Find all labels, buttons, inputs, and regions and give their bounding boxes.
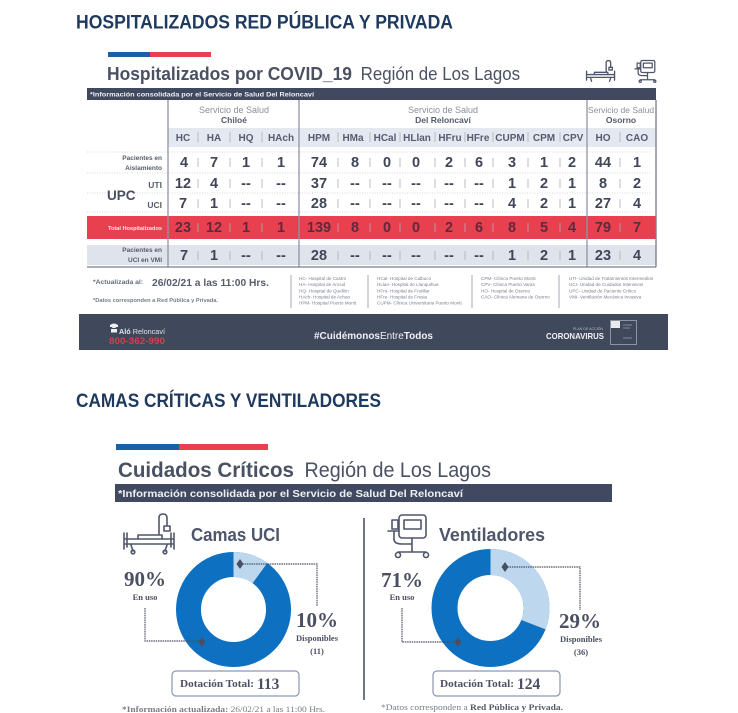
column headers: HQ	[238, 133, 254, 144]
panel: cuidados críticos infographic	[115, 444, 612, 713]
column headers: HCal	[374, 133, 397, 144]
update note	[93, 277, 269, 304]
row: total hospitalizados: 8	[351, 220, 359, 236]
row: UTI: --	[411, 176, 421, 192]
footer band: 800-362-990	[109, 336, 165, 346]
row: UCI: --	[474, 196, 484, 212]
row: total hospitalizados: 4	[568, 220, 576, 236]
donut: camas UCI	[188, 552, 278, 654]
row: UTI: --	[276, 176, 286, 192]
row: total hospitalizados: 7	[633, 220, 641, 236]
column headers: HLlan	[403, 133, 431, 144]
flag bar	[108, 52, 211, 57]
legend of abbreviations: HAch- Hospital de Achao	[299, 294, 351, 300]
icon: phone	[110, 324, 118, 332]
service headers: Servicio de Salud	[588, 105, 654, 115]
icon: ventilator	[388, 515, 428, 558]
row: UCI: --	[241, 196, 251, 212]
row: total hospitalizados	[175, 220, 641, 236]
row: total hospitalizados: 6	[475, 220, 483, 236]
heading: ventiladores: Ventiladores	[439, 524, 545, 545]
legend of abbreviations: UTI- Unidad de Tratamientos Intermedios	[569, 276, 654, 281]
panel title: Hospitalizados por COVID_19 Región de Los Lagos	[107, 64, 520, 84]
column headers: HA	[207, 133, 221, 144]
row labels: Total Hospitalizados	[108, 226, 162, 232]
legend of abbreviations: CAO- Clínica Alemana de Osorno	[481, 294, 550, 300]
row: pacientes en aislamiento: 4	[180, 155, 188, 171]
row: UTI: 37	[311, 176, 327, 192]
callout: 71% en uso	[381, 568, 462, 647]
callout: 90% en uso: En uso	[133, 592, 157, 602]
row labels: UTI	[148, 180, 162, 190]
footer band: PLAN DE ACCIÓN	[573, 326, 603, 331]
row: total hospitalizados: 2	[445, 220, 453, 236]
row: total hospitalizados: 23	[175, 220, 191, 236]
info bar	[115, 484, 612, 502]
row labels: Pacientes en	[122, 155, 162, 162]
callout: 10% disponibles: 10%	[296, 608, 338, 632]
row: UCI: --	[350, 196, 360, 212]
row: total hospitalizados: 5	[540, 220, 548, 236]
service headers	[199, 105, 654, 125]
row: pacientes en aislamiento: 3	[508, 155, 516, 171]
row: UCI: --	[382, 196, 392, 212]
legend of abbreviations: HFre- Hospital de Fresia	[377, 294, 427, 300]
service headers: Chiloé	[221, 115, 247, 125]
callout: 71% en uso: En uso	[390, 592, 414, 602]
legend of abbreviations: HPM- Hospital Puerto Montt	[299, 300, 357, 306]
row: pacientes en aislamiento: 6	[475, 155, 483, 171]
row: UTI: 2	[540, 176, 548, 192]
column headers: HO	[596, 133, 611, 144]
update note: *Actualizada al:	[93, 279, 143, 286]
footer band: #CuidémonosEntreTodos	[314, 331, 433, 342]
row: UCI en VMI: --	[382, 248, 392, 264]
row: UCI: 1	[568, 196, 576, 212]
column headers: HC	[176, 133, 190, 144]
total box: camas: 113	[257, 676, 280, 693]
total box: ventiladores: Dotación Total:	[440, 679, 514, 690]
callout: 90% en uso: 90%	[124, 567, 166, 591]
row: pacientes en aislamiento: 1	[242, 155, 250, 171]
row labels: UPC	[107, 188, 136, 203]
row: UTI: --	[241, 176, 251, 192]
row: UCI	[179, 196, 641, 212]
row: UCI en VMI: 4	[633, 248, 641, 264]
row: pacientes en aislamiento: 1	[277, 155, 285, 171]
row: UTI: 12	[175, 176, 191, 192]
row: UTI	[175, 176, 641, 192]
column headers: HFre	[467, 133, 490, 144]
service headers: Servicio de Salud	[199, 105, 269, 115]
legend of abbreviations: HA- Hospital de Ancud	[299, 282, 346, 287]
row: total hospitalizados: 8	[508, 220, 516, 236]
total box: ventiladores	[433, 671, 560, 696]
row: pacientes en aislamiento	[180, 155, 641, 171]
row: UCI: --	[444, 196, 454, 212]
service headers: Del Reloncaví	[415, 115, 472, 125]
legend of abbreviations: UPC- Unidad de Paciente Crítico	[569, 288, 637, 294]
footer band: Aló Reloncaví	[119, 329, 165, 336]
row labels	[107, 155, 162, 264]
row: UCI en VMI: --	[241, 248, 251, 264]
callout: 29% disponibles	[502, 562, 603, 657]
callout: 10% disponibles	[236, 559, 339, 656]
legend of abbreviations: HLlan- Hospital de Llanquihue	[377, 282, 439, 287]
row: UCI: 1	[210, 196, 218, 212]
row: UTI: --	[444, 176, 454, 192]
column headers: CPM	[533, 133, 555, 144]
callout: 71% en uso: 71%	[381, 568, 423, 592]
column headers	[168, 128, 656, 147]
callout: 10% disponibles: (11)	[310, 646, 324, 656]
row: total hospitalizados: 1	[277, 220, 285, 236]
legend of abbreviations: HQ- Hospital de Quellón	[299, 288, 349, 294]
row: total hospitalizados: 139	[307, 220, 331, 236]
row: UCI: 4	[508, 196, 516, 212]
legend of abbreviations: VMI- Ventilación Mecánica Invasiva	[569, 294, 642, 300]
service headers: Osorno	[606, 115, 636, 125]
column headers: HPM	[308, 133, 330, 144]
row labels: UCI en VMI	[128, 257, 162, 264]
row: UTI: 2	[633, 176, 641, 192]
panel title: Cuidados Críticos Región de Los Lagos	[118, 459, 491, 482]
row: pacientes en aislamiento: 2	[568, 155, 576, 171]
row: total hospitalizados: 0	[412, 220, 420, 236]
total box: ventiladores: 124	[517, 676, 540, 693]
row: UTI: --	[382, 176, 392, 192]
legend of abbreviations: CUPM- Clínica Universitaria Puerto Montt	[377, 300, 462, 306]
row: UTI: --	[350, 176, 360, 192]
row bands	[87, 216, 656, 265]
legend of abbreviations: CPV- Clínica Puerto Varas	[481, 282, 535, 287]
row: pacientes en aislamiento: 0	[412, 155, 420, 171]
row: UCI: 2	[540, 196, 548, 212]
row: pacientes en aislamiento: 0	[383, 155, 391, 171]
update note: *Datos corresponden a Red Pública y Privada.	[93, 298, 218, 304]
footer band: CORONAVIRUS	[546, 331, 604, 341]
heading: camas UCI: Camas UCI	[191, 524, 280, 545]
row: UCI: --	[276, 196, 286, 212]
row: UTI: --	[474, 176, 484, 192]
row: pacientes en aislamiento: 8	[351, 155, 359, 171]
callout: 29% disponibles: (36)	[574, 647, 588, 657]
row: UTI: 1	[568, 176, 576, 192]
total box: camas: Dotación Total:	[180, 679, 254, 690]
info bar: *Información consolidada por el Servicio de Salud Del Reloncaví	[118, 489, 464, 500]
row: total hospitalizados: 1	[242, 220, 250, 236]
row: UCI en VMI	[180, 248, 641, 264]
flag bar	[116, 444, 268, 450]
row: pacientes en aislamiento: 1	[633, 155, 641, 171]
row: pacientes en aislamiento: 7	[210, 155, 218, 171]
callout: 29% disponibles: 29%	[559, 609, 601, 633]
heading: camas críticas: CAMAS CRÍTICAS Y VENTILADORES	[76, 390, 381, 412]
row labels: UCI	[147, 200, 162, 210]
row: UCI: 27	[595, 196, 611, 212]
column headers: CPV	[563, 133, 584, 144]
info bar: *Información consolidada por el Servicio de Salud Del Reloncaví	[90, 92, 314, 98]
legend of abbreviations: UCI- Unidad de Cuidados Intensivos	[569, 282, 644, 287]
column headers: HMa	[342, 133, 364, 144]
row: UCI en VMI: 2	[540, 248, 548, 264]
row: UCI: 28	[311, 196, 327, 212]
callout: 90% en uso	[124, 567, 206, 647]
row: pacientes en aislamiento: 2	[445, 155, 453, 171]
row: UCI: 4	[633, 196, 641, 212]
row: UCI en VMI: 1	[568, 248, 576, 264]
heading: hospitalizados: HOSPITALIZADOS RED PÚBLICA Y PRIVADA	[76, 12, 453, 34]
column headers: HAch	[268, 133, 294, 144]
info bar	[87, 88, 656, 100]
note: datos corresponden: *Datos corresponden a Red Pública y Privada.	[381, 702, 563, 712]
column headers: CAO	[626, 133, 648, 144]
icon: bed	[124, 514, 174, 554]
row: pacientes en aislamiento: 1	[540, 155, 548, 171]
total box: camas	[172, 671, 299, 696]
column headers: HFru	[438, 133, 462, 144]
row: UTI: 4	[210, 176, 218, 192]
row: UCI en VMI: --	[350, 248, 360, 264]
panel: hospitalizados table infographic	[79, 52, 668, 350]
row: UCI: --	[411, 196, 421, 212]
row: pacientes en aislamiento: 74	[311, 155, 327, 171]
callout: 29% disponibles: Disponibles	[560, 634, 603, 644]
footer band	[79, 314, 668, 350]
row: total hospitalizados: 79	[595, 220, 611, 236]
row: UCI en VMI: --	[474, 248, 484, 264]
row labels: Aislamiento	[125, 165, 162, 172]
update note: 26/02/21 a las 11:00 Hrs.	[152, 277, 269, 289]
government crest	[610, 320, 636, 344]
callout: 10% disponibles: Disponibles	[296, 633, 339, 643]
donut: ventiladores	[444, 549, 550, 654]
legend of abbreviations: HCal- Hospital de Calbuco	[377, 276, 432, 281]
row: UTI: 1	[508, 176, 516, 192]
row: UTI: 8	[599, 176, 607, 192]
row: UCI en VMI: --	[411, 248, 421, 264]
row: UCI en VMI: --	[444, 248, 454, 264]
legend of abbreviations: HFru- Hospital de Frutillar	[377, 288, 430, 294]
row: UCI en VMI: --	[276, 248, 286, 264]
row labels: Pacientes en	[122, 247, 162, 254]
row: pacientes en aislamiento: 44	[595, 155, 611, 171]
icon: ventilator small	[635, 61, 656, 82]
column headers: CUPM	[495, 133, 525, 144]
legend of abbreviations: HO- Hospital de Osorno	[481, 288, 530, 294]
legend of abbreviations	[291, 275, 654, 308]
row: UCI en VMI: 1	[210, 248, 218, 264]
row: total hospitalizados: 12	[206, 220, 222, 236]
row: UCI en VMI: 1	[508, 248, 516, 264]
row: UCI: 7	[179, 196, 187, 212]
row: UCI en VMI: 23	[595, 248, 611, 264]
service headers: Servicio de Salud	[408, 105, 478, 115]
row: total hospitalizados: 0	[383, 220, 391, 236]
legend of abbreviations: HC- Hospital de Castro	[299, 276, 347, 281]
icon: bed small	[587, 61, 615, 81]
legend of abbreviations: CPM- Clínica Puerto Montt	[481, 276, 536, 281]
row: UCI en VMI: 28	[311, 248, 327, 264]
row: UCI en VMI: 7	[180, 248, 188, 264]
